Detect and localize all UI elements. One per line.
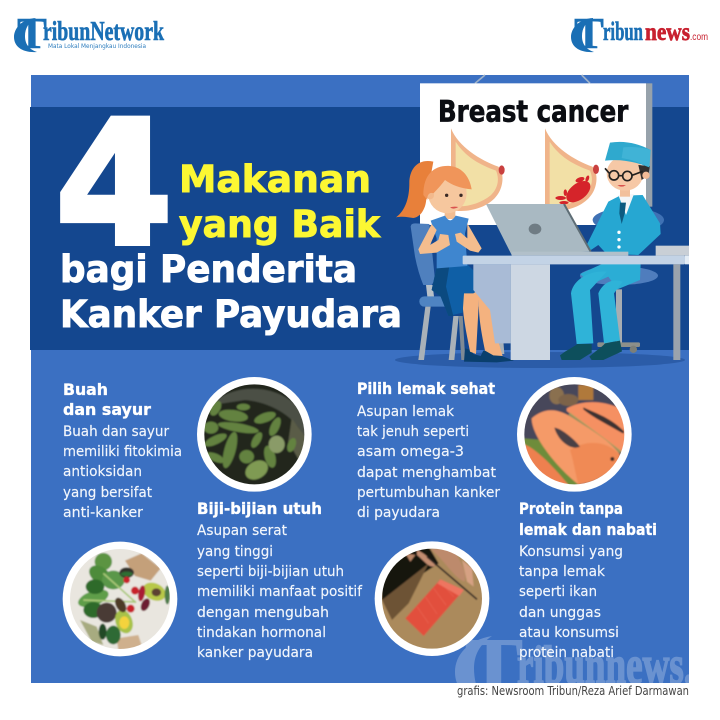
text block: Protein tanpa lemak dan nabati: Protein tanpa bbox=[519, 499, 623, 518]
text block: Buah dan sayur: dan sayur bbox=[63, 400, 151, 419]
text block: Protein tanpa lemak dan nabati: atau konsumsi bbox=[519, 625, 619, 641]
logo: Tribunnews: T bbox=[574, 9, 604, 58]
doctor figure bbox=[560, 142, 661, 360]
logo: Tribunnews bbox=[571, 9, 708, 58]
text block: Protein tanpa lemak dan nabati bbox=[519, 499, 657, 661]
text block: Protein tanpa lemak dan nabati: Konsumsi yang bbox=[519, 544, 623, 560]
text block: Biji-bijian utuh bbox=[197, 499, 363, 661]
text block: Biji-bijian utuh: yang tinggi bbox=[197, 544, 273, 560]
text block: Buah dan sayur: memiliki fitokimia bbox=[63, 444, 182, 460]
title: number 4: 4 bbox=[55, 84, 173, 284]
laptop bbox=[486, 204, 628, 256]
text block: Pilih lemak sehat: asam omega-3 bbox=[357, 444, 464, 460]
title: bagi Penderita Kanker Payudara bbox=[60, 248, 402, 336]
logo: Tribunnews: ribun bbox=[603, 17, 643, 46]
logo: Tribun Network bbox=[14, 9, 164, 58]
patient chair bbox=[411, 223, 504, 360]
photo: green soybean pods bbox=[195, 375, 315, 495]
text block: Protein tanpa lemak dan nabati: dan unggas bbox=[519, 605, 601, 621]
logo: Tribunnews: .com bbox=[690, 32, 708, 43]
text block: Buah dan sayur: Buah bbox=[63, 380, 108, 399]
text block: Buah dan sayur: yang bersifat bbox=[63, 485, 152, 501]
illustration: doctor consultation bbox=[395, 75, 689, 368]
text block: Biji-bijian utuh: memiliki manfaat positif bbox=[197, 584, 363, 600]
text block: Biji-bijian utuh: Asupan serat bbox=[197, 523, 287, 539]
text block: Buah dan sayur: antioksidan bbox=[63, 464, 142, 480]
healthy breast diagram bbox=[451, 128, 505, 211]
text block: Pilih lemak sehat: Asupan lemak bbox=[357, 404, 455, 420]
text block: Protein tanpa lemak dan nabati: protein nabati bbox=[519, 645, 614, 661]
text block: Protein tanpa lemak dan nabati: tanpa lemak bbox=[519, 564, 606, 580]
text block: Buah dan sayur: anti-kanker bbox=[63, 505, 143, 521]
watermark: Tribunnews bbox=[455, 636, 689, 683]
photo: papaya halves bbox=[515, 375, 635, 495]
text block: Biji-bijian utuh: Biji-bijian utuh bbox=[197, 499, 322, 518]
text block: Biji-bijian utuh: kanker payudara bbox=[197, 645, 313, 661]
title: bagi Penderita Kanker Payudara: bagi Penderita bbox=[60, 248, 357, 291]
logo: Tribunnews: news bbox=[645, 19, 690, 46]
text block: Pilih lemak sehat: di payudara bbox=[357, 505, 440, 521]
logo: Tribun Network: Mata Lokal Menjangkau Indonesia bbox=[48, 42, 146, 50]
text block: Pilih lemak sehat: dapat menghambat bbox=[357, 465, 497, 481]
photo: salmon fillet on board bbox=[372, 540, 492, 660]
title: Makanan yang Baik: Makanan bbox=[179, 158, 371, 201]
logo: Tribun Network: T bbox=[17, 9, 47, 58]
logo: Tribun Network: ribunNetwork bbox=[43, 16, 164, 46]
panel: blue background bbox=[31, 75, 689, 683]
text block: Protein tanpa lemak dan nabati: lemak dan nabati bbox=[519, 520, 657, 539]
text block: Pilih lemak sehat: Pilih lemak sehat bbox=[357, 379, 495, 398]
photo: vegetables and avocado bbox=[60, 540, 180, 660]
watermark: Tribunnews: T bbox=[465, 622, 523, 709]
floor shadow bbox=[395, 352, 685, 368]
poster heading: Breast cancer bbox=[438, 95, 629, 129]
title: bagi Penderita Kanker Payudara: Kanker Payudara bbox=[60, 293, 402, 336]
tumor breast diagram bbox=[545, 128, 599, 211]
text block: Pilih lemak sehat bbox=[357, 379, 500, 521]
text block: Buah dan sayur: Buah dan sayur bbox=[63, 424, 169, 440]
text block: Biji-bijian utuh: seperti biji-bijian utuh bbox=[197, 564, 344, 580]
text block: Biji-bijian utuh: tindakan hormonal bbox=[197, 625, 326, 641]
desk bbox=[463, 246, 689, 360]
poster: breast cancer bbox=[420, 75, 652, 225]
text block: Pilih lemak sehat: pertumbuhan kanker bbox=[357, 485, 500, 501]
title: Makanan yang Baik: yang Baik bbox=[179, 203, 381, 246]
text block: Protein tanpa lemak dan nabati: seperti ikan bbox=[519, 584, 597, 600]
text block: Buah dan sayur bbox=[63, 380, 182, 521]
text block: Biji-bijian utuh: dengan mengubah bbox=[197, 605, 329, 621]
doctor stool bbox=[580, 208, 664, 353]
panel: dark header band bbox=[30, 107, 689, 350]
title: Makanan yang Baik bbox=[179, 158, 381, 246]
patient figure bbox=[396, 161, 514, 362]
text block: Pilih lemak sehat: tak jenuh seperti bbox=[357, 424, 469, 440]
